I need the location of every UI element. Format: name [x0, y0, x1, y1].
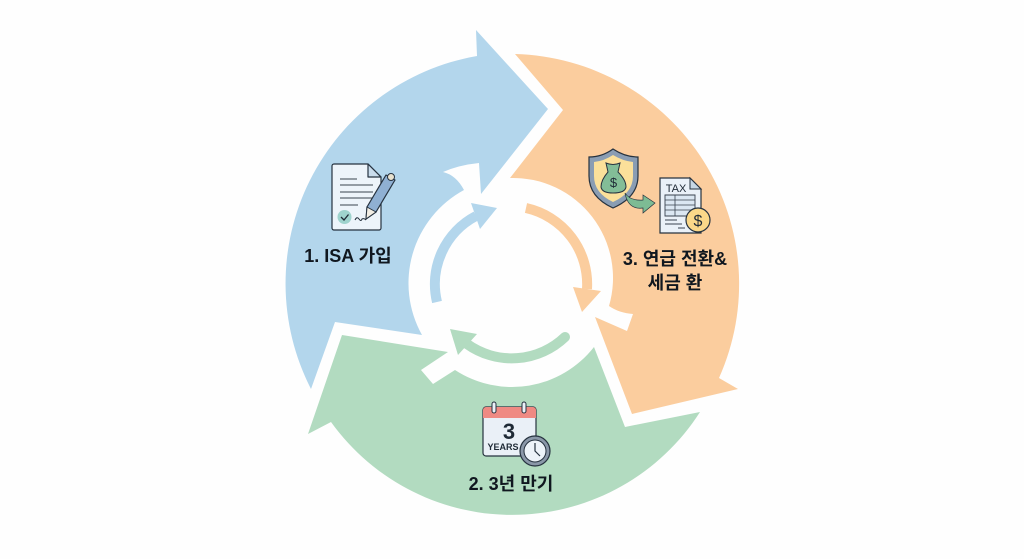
icon: calendar with clock: YEARS	[487, 442, 519, 452]
panel: step 3 pension conversion and tax refund	[510, 54, 739, 414]
blue cycle arrow	[286, 30, 548, 389]
orange cycle arrow	[510, 54, 739, 414]
panel: step 2 three-year maturity	[308, 335, 700, 515]
icon: shield with money bag	[589, 149, 638, 208]
icon: calendar with clock	[483, 402, 550, 466]
inner arrow: orange	[526, 208, 601, 312]
icon: tax document with coin	[660, 178, 710, 233]
inner arrow: green	[450, 329, 565, 358]
icon: signed document with pen	[332, 164, 395, 230]
green cycle arrow	[308, 335, 700, 515]
inner arrow: blue	[435, 203, 497, 302]
icon: tax document with coin: $	[694, 213, 703, 230]
icon: green transfer arrow	[625, 193, 655, 213]
label: step 2: 2. 3년 만기	[469, 474, 553, 494]
label: step 1: 1. ISA 가입	[304, 246, 392, 266]
label: step 3: 3. 연급 전환&	[623, 249, 727, 269]
panel: step 1 ISA signup	[286, 30, 548, 389]
inner cycle arrows	[435, 203, 601, 358]
icon: tax document with coin: TAX	[666, 183, 687, 195]
icon: calendar with clock: 3	[503, 419, 515, 444]
icon: shield with money bag: $	[610, 175, 618, 190]
label: step 3: 세금 환	[648, 273, 703, 293]
